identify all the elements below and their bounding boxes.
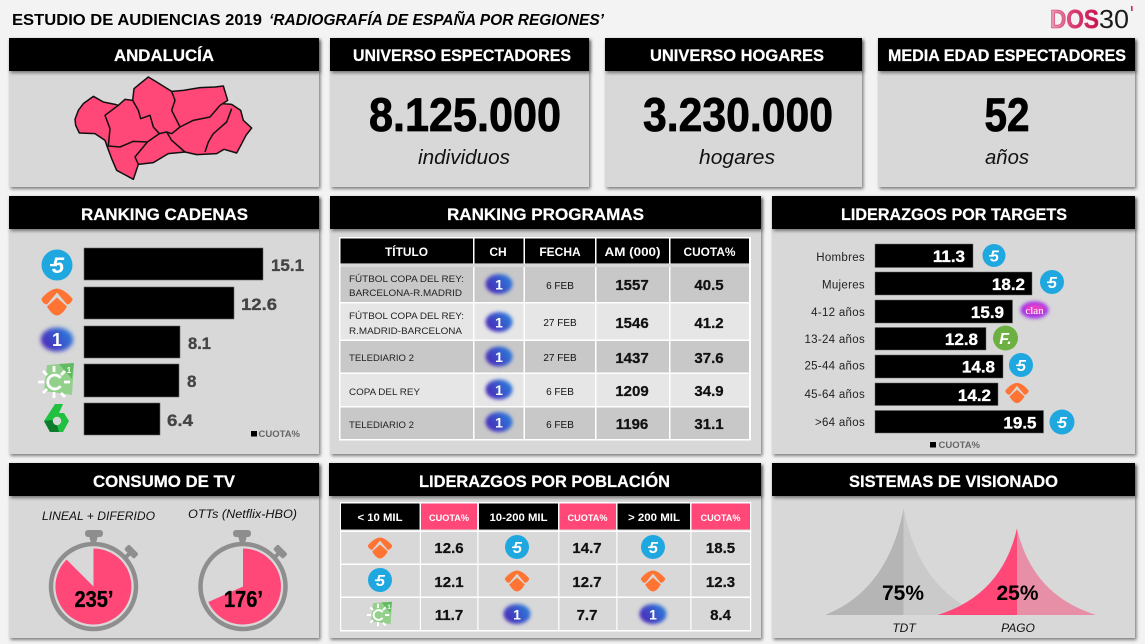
icon: Antena 3	[41, 288, 73, 316]
heading: Ranking programas: RANKING PROGRAMAS	[447, 205, 644, 224]
table: ranking programas: TÍTULO	[385, 244, 428, 259]
stat: 52 años: años	[985, 147, 1029, 169]
table: ranking programas: 40.5	[694, 277, 724, 294]
stat: 8.125.000 individuos: 8.125.000	[369, 88, 561, 141]
table: ranking programas: 1	[495, 382, 503, 398]
icon: Antena 3, 45-64	[1005, 383, 1029, 403]
table: ranking programas: 27 FEB	[543, 353, 577, 364]
bar chart: ranking cadenas	[84, 248, 304, 435]
panel: Liderazgos por targets	[772, 196, 1135, 454]
table: liderazgos por población: 8.4	[710, 607, 732, 624]
table: liderazgos por población: 10-200 MIL	[490, 512, 548, 524]
label: 25% Pago: 25%	[996, 582, 1039, 605]
label: 75% TDT	[882, 582, 924, 635]
table: ranking programas: TELEDIARIO 2	[349, 420, 414, 431]
bar chart: liderazgos por targets: 18.2	[992, 275, 1025, 294]
icon: Telecinco, Mujeres	[1040, 270, 1064, 294]
table: ranking programas: 1196	[616, 416, 648, 433]
table: liderazgos por población	[340, 502, 751, 632]
table: ranking programas: FÚTBOL COPA DEL REY:	[349, 274, 464, 285]
stopwatch: lineal + diferido: 235’	[74, 586, 114, 612]
table: liderazgos por población: 12.7	[572, 574, 602, 591]
table: liderazgos por población: < 10 MIL	[358, 512, 403, 524]
icon: Telecinco, Mujeres: 5	[1048, 275, 1058, 292]
icon: Clan: clan	[1025, 305, 1044, 317]
stopwatch: OTTs: 176’	[224, 586, 263, 612]
stat: 52 años	[984, 88, 1030, 169]
table: liderazgos por población: 12.1	[434, 574, 464, 591]
bar chart: liderazgos por targets: 15.9	[971, 303, 1004, 322]
heading: Consumo de TV: CONSUMO DE TV	[93, 472, 236, 491]
stat: 8.125.000 individuos: individuos	[418, 147, 510, 169]
bar chart: liderazgos por targets: 12.8	[945, 330, 978, 349]
table: liderazgos por población: 18.5	[706, 540, 735, 557]
bar chart: ranking cadenas: 12.6	[241, 295, 277, 314]
stopwatch: lineal + diferido	[42, 509, 155, 629]
heading: Universo hogares: UNIVERSO HOGARES	[650, 46, 824, 65]
bar chart: liderazgos por targets: Hombres	[816, 252, 865, 264]
table: liderazgos por población: 5	[376, 573, 386, 590]
logo: DOS30: 30	[1099, 4, 1129, 34]
icon: Telecinco, >64	[1050, 410, 1074, 434]
table: ranking programas: COPA DEL REY	[349, 387, 421, 398]
stat: 3.230.000 hogares: 3.230.000	[643, 88, 833, 141]
stopwatch: OTTs	[188, 507, 297, 629]
label: 25% Pago: PAGO	[1001, 621, 1035, 635]
bar chart: ranking cadenas: 6.4	[167, 411, 194, 430]
table: liderazgos por población: 11.7	[435, 607, 463, 624]
heading: Ranking cadenas: RANKING CADENAS	[81, 205, 248, 224]
icon: Factoría de Ficción	[993, 326, 1018, 350]
table: liderazgos por población: CUOTA%	[700, 513, 741, 524]
table: ranking programas: 6 FEB	[546, 387, 574, 398]
table: ranking programas: CH	[489, 245, 507, 259]
table: ranking programas: R.MADRID-BARCELONA	[349, 326, 463, 337]
table: ranking programas: AM (000)	[604, 245, 660, 259]
table: liderazgos por población: 12.6	[434, 540, 464, 557]
bar chart: liderazgos por targets: 14.2	[958, 386, 991, 405]
icon: Telecinco, 25-44: 5	[1017, 358, 1027, 375]
table: ranking programas: 1209	[615, 383, 649, 400]
icon: Clan	[1020, 302, 1048, 318]
heading: Liderazgos por targets: LIDERAZGOS POR TARGETS	[841, 205, 1067, 224]
bar chart: liderazgos por targets: 45-64 años	[804, 389, 865, 401]
bar chart: liderazgos por targets: Mujeres	[822, 280, 865, 292]
table: liderazgos por población: 1	[513, 606, 521, 622]
table: ranking programas: 1	[495, 349, 503, 365]
table: ranking programas: CUOTA%	[684, 245, 736, 259]
icon: Telecinco, Hombres: 5	[990, 248, 1000, 266]
chart: TDT peak	[825, 508, 983, 615]
bar chart: liderazgos por targets: 11.3	[933, 247, 965, 266]
bar chart: liderazgos por targets	[804, 244, 1044, 433]
title: ESTUDIO DE AUDIENCIAS 2019	[12, 12, 262, 29]
table: liderazgos por población: CUOTA%	[568, 513, 608, 524]
table: liderazgos por población: 1	[649, 606, 657, 622]
panel: Ranking programas	[330, 196, 761, 454]
stopwatch: OTTs: OTTs (Netflix-HBO)	[188, 507, 297, 521]
panel: Media edad espectadores	[878, 38, 1135, 187]
logo: DOS30: DOS	[1050, 4, 1099, 34]
panel: Universo espectadores	[330, 38, 589, 187]
bar chart: liderazgos por targets: 4-12 años	[811, 307, 865, 319]
panel: Universo hogares	[605, 38, 862, 187]
table: ranking programas: 6 FEB	[546, 420, 574, 431]
bar chart: liderazgos por targets: 25-44 años	[804, 360, 865, 372]
table: ranking programas: 1	[495, 314, 503, 330]
bar chart: ranking cadenas: 8.1	[188, 334, 211, 353]
panel: Andalucía	[9, 38, 319, 187]
table: liderazgos por población: 7.7	[577, 607, 597, 624]
label: 25% Pago	[996, 582, 1039, 635]
icon: Telecinco, Hombres	[982, 244, 1006, 267]
bar chart: liderazgos por targets: 19.5	[1003, 414, 1036, 432]
stopwatch: lineal + diferido: LINEAL + DIFERIDO	[42, 509, 155, 523]
icon: La 1	[41, 328, 73, 352]
panel: Consumo de TV	[9, 463, 319, 638]
heading: Media edad espectadores: MEDIA EDAD ESPECTADORES	[888, 46, 1126, 65]
stat: 3.230.000 hogares: hogares	[699, 147, 775, 169]
legend: cuota %: CUOTA%	[938, 440, 980, 450]
table: ranking programas: FÚTBOL COPA DEL REY:	[349, 311, 464, 322]
stat: 52 años: 52	[984, 88, 1030, 141]
icon: Telecinco: 5	[52, 253, 65, 278]
icon: Telecinco	[42, 250, 72, 280]
heading: Sistemas de visionado: SISTEMAS DE VISIONADO	[849, 472, 1058, 491]
table: ranking programas: 31.1	[694, 416, 724, 433]
map: Andalucía provinces	[75, 77, 252, 179]
table: ranking programas: 1437	[615, 350, 649, 367]
table: ranking programas: BARCELONA-R.MADRID	[349, 288, 462, 299]
heading: Liderazgos por población: LIDERAZGOS POR POBLACIÓN	[419, 472, 670, 491]
table: ranking programas: 1546	[615, 315, 649, 332]
heading: Andalucía: ANDALUCÍA	[114, 46, 214, 65]
icon: Factoría de Ficción: F.	[999, 331, 1012, 348]
table: liderazgos por población: 12.3	[706, 574, 735, 591]
icon: La 1: 1	[52, 330, 62, 350]
stat: 3.230.000 hogares	[643, 88, 833, 169]
table: liderazgos por población: 14.7	[572, 540, 602, 557]
label: 75% TDT: 75%	[882, 582, 924, 605]
legend: cuota %: CUOTA%	[258, 429, 300, 439]
title	[12, 9, 605, 29]
panel: Ranking cadenas	[9, 196, 319, 454]
icon: Telecinco, 25-44	[1009, 353, 1033, 377]
chart: Pago peak	[938, 528, 1096, 615]
bar chart: ranking cadenas: 8	[187, 372, 196, 391]
icon: Telecinco, >64: 5	[1058, 415, 1068, 432]
table: ranking programas: 41.2	[694, 315, 724, 332]
table: ranking programas: FECHA	[539, 245, 581, 259]
table: ranking programas: 1	[495, 414, 503, 430]
bar chart: liderazgos por targets: 14.8	[962, 358, 995, 376]
label: 75% TDT: TDT	[892, 621, 917, 635]
icon: La Sexta	[44, 404, 69, 432]
bar chart: liderazgos por targets: >64 años	[815, 417, 865, 429]
table: ranking programas: 34.9	[694, 383, 724, 400]
table: liderazgos por población: > 200 MIL	[628, 512, 680, 524]
panel: Liderazgos por población	[329, 463, 761, 638]
table: liderazgos por población: 5	[649, 540, 659, 557]
table: liderazgos por población: 5	[513, 540, 523, 557]
table: ranking programas	[339, 237, 751, 440]
panel: Sistemas de visionado	[772, 463, 1135, 638]
logo: DOS30	[1050, 4, 1133, 34]
table: ranking programas: 1	[495, 276, 503, 292]
bar chart: ranking cadenas: 15.1	[271, 256, 304, 275]
table: ranking programas: 6 FEB	[546, 281, 574, 292]
table: ranking programas: 37.6	[694, 350, 724, 367]
heading: Universo espectadores: UNIVERSO ESPECTADORES	[353, 46, 571, 65]
table: ranking programas: 1557	[615, 277, 649, 294]
icon: Canal Sur 1	[38, 363, 74, 398]
table: ranking programas: TELEDIARIO 2	[349, 353, 414, 364]
table: liderazgos por población: CUOTA%	[429, 513, 470, 524]
stat: 8.125.000 individuos	[369, 88, 561, 169]
table: ranking programas: 27 FEB	[543, 318, 577, 329]
icon: Canal Sur 1: 1	[67, 366, 72, 375]
bar chart: liderazgos por targets: 13-24 años	[804, 334, 865, 346]
table: liderazgos por población: 1	[387, 605, 391, 611]
title: ‘RADIOGRAFÍA DE ESPAÑA POR REGIONES’	[269, 9, 605, 29]
